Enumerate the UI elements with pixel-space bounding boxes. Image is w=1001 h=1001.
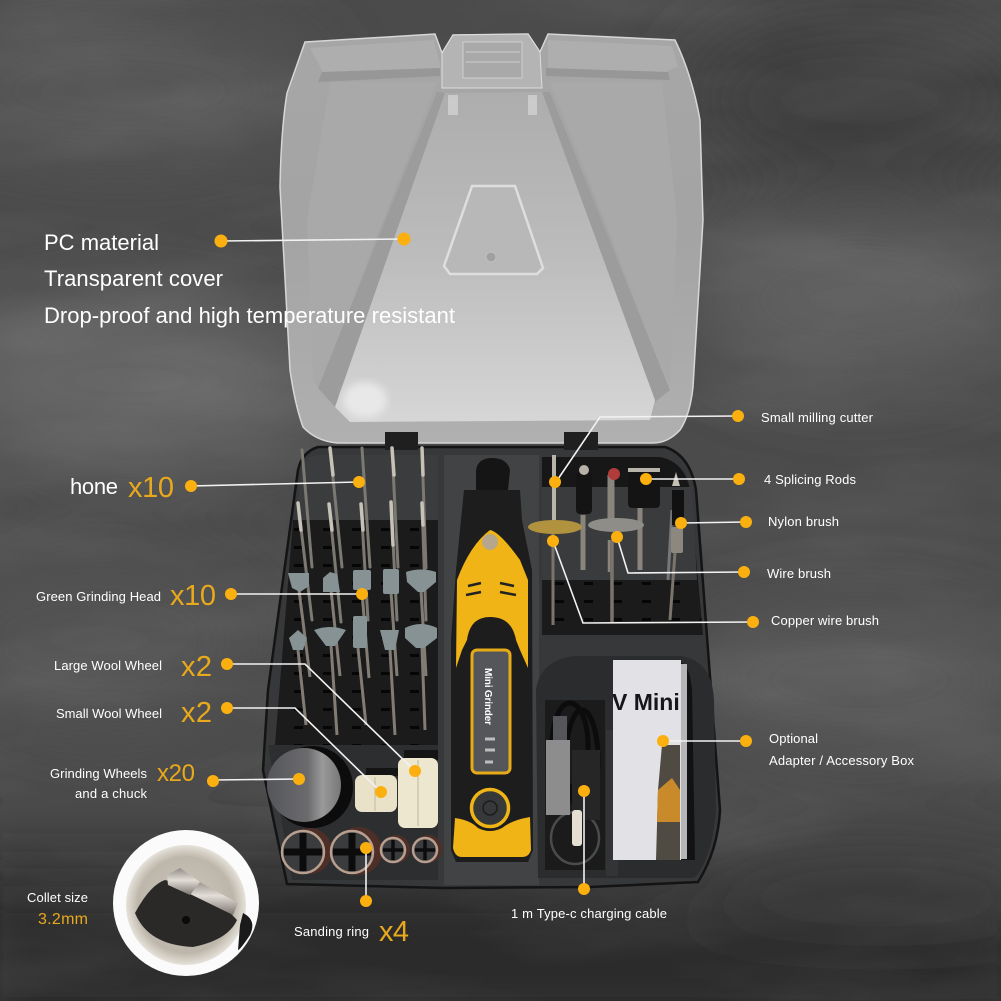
manual booklet bbox=[613, 660, 681, 860]
callout: small wool wheel: x2 bbox=[181, 697, 212, 729]
vents bbox=[466, 583, 516, 595]
manual grinder image bbox=[656, 745, 680, 860]
yellow housing bbox=[456, 530, 528, 668]
callout: optional adapter bbox=[657, 731, 914, 768]
callout: green grinding head: Green Grinding Head bbox=[36, 589, 161, 604]
callout: charging cable bbox=[511, 785, 667, 921]
cover text bbox=[44, 230, 455, 328]
callout: sanding ring: Sanding ring bbox=[294, 924, 369, 939]
callout: nylon brush bbox=[675, 514, 839, 529]
manual cover text: V Mini bbox=[612, 689, 680, 715]
right tray accessories bbox=[528, 455, 684, 625]
hinges bbox=[385, 432, 418, 450]
lid reinforcing ribs bbox=[318, 92, 445, 407]
small wool wheel bbox=[366, 768, 398, 776]
steel wire brush bbox=[588, 518, 644, 532]
lower right compartment bbox=[536, 656, 716, 878]
callout: small milling cutter: Small milling cutter bbox=[761, 410, 874, 425]
lower left compartment bbox=[268, 745, 438, 880]
nylon brush bbox=[668, 510, 672, 580]
power button bbox=[472, 790, 508, 826]
callout: large wool wheel bbox=[54, 651, 421, 777]
callout: hone: x10 bbox=[128, 472, 174, 504]
transparent plastic lid bbox=[280, 34, 703, 443]
lid centre panel bbox=[335, 92, 655, 422]
callout: large wool wheel: Large Wool Wheel bbox=[54, 658, 162, 673]
callout: grinding wheels bbox=[50, 760, 305, 801]
right accessories tray bbox=[542, 457, 703, 635]
cover text: Transparent cover bbox=[44, 266, 223, 291]
callout: sanding ring: x4 bbox=[379, 916, 409, 948]
callout: splicing rods bbox=[640, 472, 856, 487]
callout: hone bbox=[70, 472, 365, 504]
collet inset bbox=[113, 830, 259, 976]
callout: small wool wheel: Small Wool Wheel bbox=[56, 706, 162, 721]
tool case body bbox=[263, 432, 720, 888]
lid trapezoid embossing bbox=[444, 186, 543, 274]
callout: small wool wheel bbox=[56, 697, 387, 798]
grinder brand text: Mini Grinder bbox=[482, 668, 493, 725]
label panel bbox=[472, 650, 510, 773]
callout: copper wire brush bbox=[547, 535, 879, 628]
large wool wheel bbox=[404, 750, 438, 760]
left bit tray bbox=[276, 455, 438, 745]
callout: wire brush: Wire brush bbox=[767, 566, 831, 581]
cover text: PC material bbox=[44, 230, 159, 255]
callout: nylon brush: Nylon brush bbox=[768, 514, 839, 529]
callout: green grinding head bbox=[36, 580, 368, 612]
cover text: Drop-proof and high temperature resistant bbox=[44, 303, 455, 328]
callout: cover bbox=[44, 230, 455, 328]
callout: green grinding head: x10 bbox=[170, 580, 216, 612]
callout: optional adapter: Adapter / Accessory Box bbox=[769, 753, 914, 768]
splicing rods bbox=[580, 515, 586, 570]
charging cable coil bbox=[552, 703, 598, 810]
callout: hone: hone bbox=[70, 474, 118, 499]
callout: small milling cutter bbox=[549, 410, 874, 488]
milling cutter rod bbox=[552, 455, 556, 520]
callout: charging cable: 1 m Type-c charging cable bbox=[511, 906, 667, 921]
label: collet size: Collet size bbox=[27, 890, 88, 905]
rotary grinder tool bbox=[451, 458, 533, 862]
callout: grinding wheels: and a chuck bbox=[75, 786, 148, 801]
label: collet size bbox=[27, 890, 88, 928]
label: collet size: 3.2mm bbox=[38, 911, 88, 928]
callout: splicing rods: 4 Splicing Rods bbox=[764, 472, 856, 487]
callout: wire brush bbox=[611, 531, 831, 581]
callout: sanding ring bbox=[294, 842, 409, 948]
wool wheels and sanding rings bbox=[267, 746, 442, 875]
green grinding head stones bbox=[288, 569, 437, 735]
callout: optional adapter: Optional bbox=[769, 731, 818, 746]
callout: grinding wheels: x20 bbox=[157, 760, 195, 787]
centre tool bay bbox=[444, 455, 539, 885]
grinding wheels box bbox=[271, 746, 353, 828]
copper wire brush bbox=[528, 520, 582, 534]
hone bits: back rows bbox=[298, 448, 426, 622]
yellow base bbox=[453, 817, 531, 857]
sanding rings bbox=[286, 827, 442, 875]
callout: large wool wheel: x2 bbox=[181, 651, 212, 683]
callout: grinding wheels: Grinding Wheels bbox=[50, 766, 148, 781]
cable and manual compartment bbox=[546, 660, 687, 864]
callout: copper wire brush: Copper wire brush bbox=[771, 613, 879, 628]
